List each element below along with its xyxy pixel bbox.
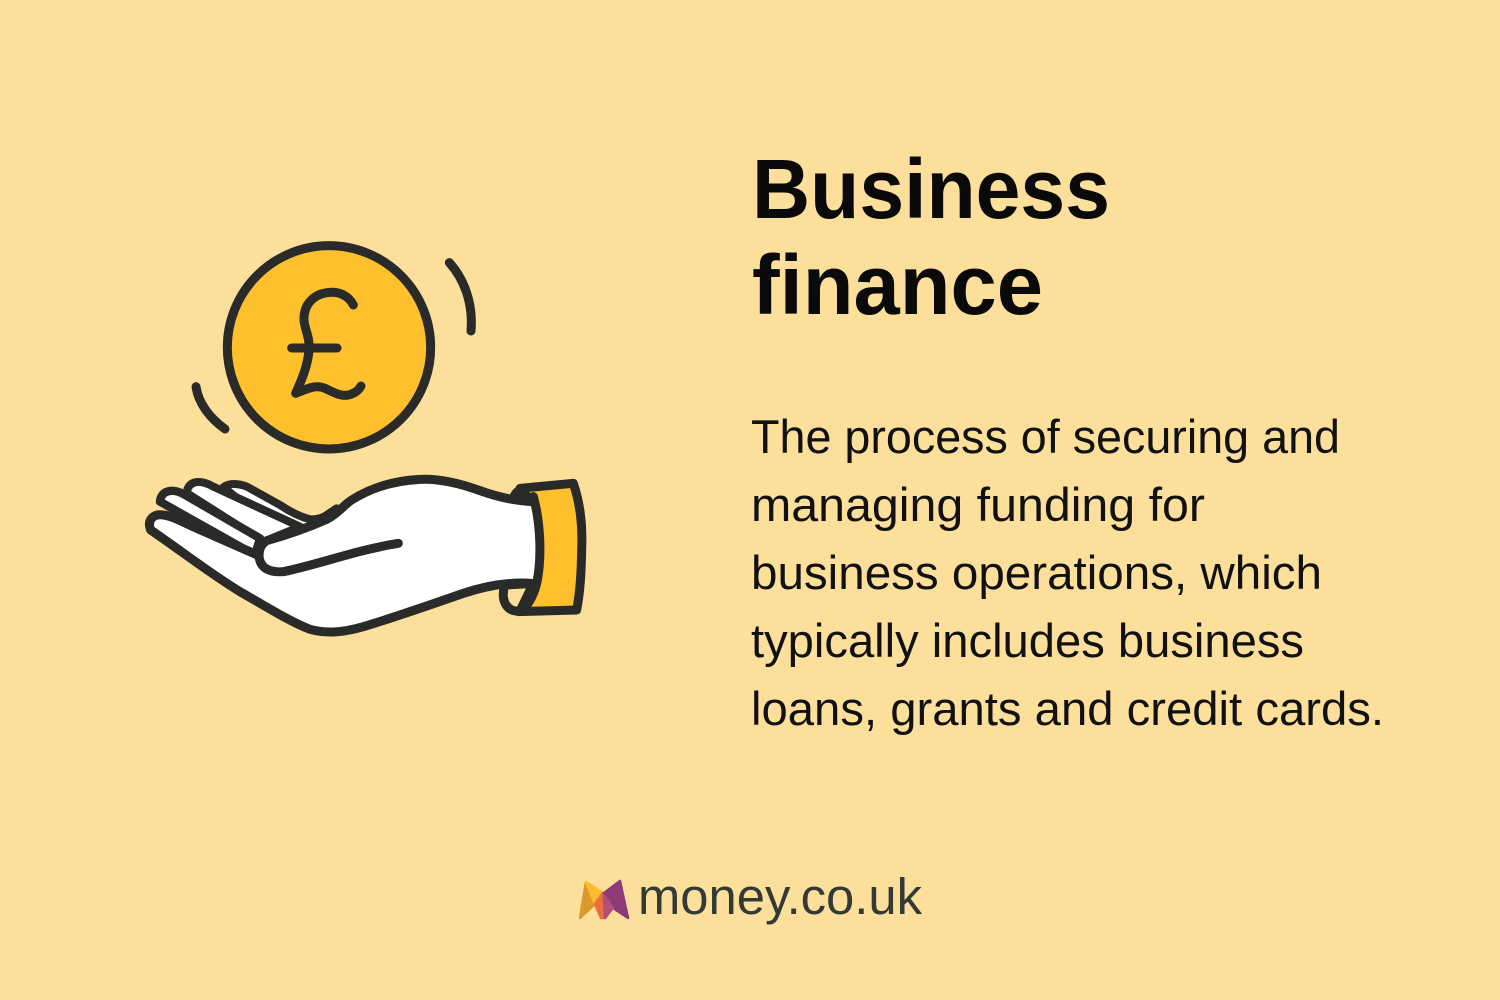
logo: money.co.uk xyxy=(580,868,922,925)
heading: Business xyxy=(752,142,1110,236)
description text: loans, grants and credit cards. xyxy=(751,682,1384,735)
illustration: hand and coin xyxy=(149,246,582,632)
icon: pound coin xyxy=(227,246,431,449)
description text xyxy=(751,410,1384,735)
icon: motion arc left xyxy=(196,387,225,429)
description text: typically includes business xyxy=(751,614,1304,667)
description text: business operations, which xyxy=(751,546,1322,599)
icon: motion arc right xyxy=(449,263,471,331)
logo wordmark: money.co.uk xyxy=(638,868,922,925)
icon: logo mark xyxy=(580,881,628,918)
heading xyxy=(752,142,1110,332)
icon: open hand with cuff xyxy=(149,479,582,632)
description text: managing funding for xyxy=(751,478,1205,531)
description text: The process of securing and xyxy=(751,410,1340,463)
heading: finance xyxy=(752,238,1043,332)
